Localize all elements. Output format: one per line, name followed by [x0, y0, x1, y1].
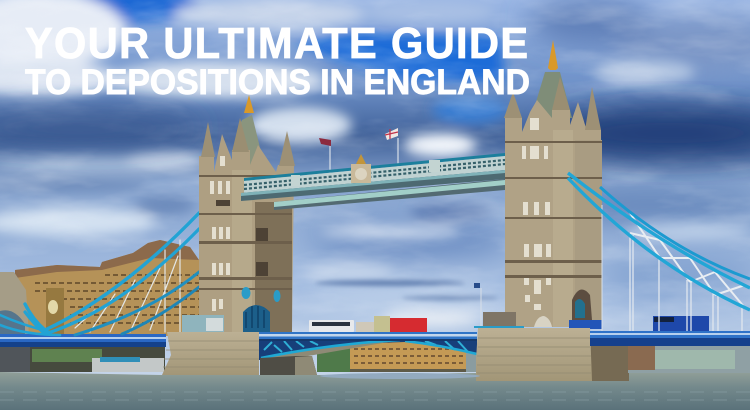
- right tower pier: [476, 328, 629, 381]
- city building left: [15, 240, 199, 336]
- left suspension cables: [0, 213, 199, 335]
- flag pole and lamp at right pier: [474, 283, 524, 328]
- title: [25, 19, 530, 102]
- left approach span deck: [0, 334, 166, 347]
- buses on bascule bridge: [309, 316, 427, 332]
- left tower: [182, 95, 295, 332]
- title: TO DEPOSITIONS IN ENGLAND: [25, 64, 530, 102]
- river water: [0, 372, 750, 410]
- flags and poles: [319, 128, 398, 175]
- walkway crest: [351, 154, 371, 183]
- right approach deck with blue bus: [590, 316, 750, 346]
- high-level walkway: [241, 153, 505, 210]
- left tower roof and spire: [231, 95, 265, 168]
- far bank under left deck: [0, 346, 165, 372]
- right tower: [504, 40, 602, 329]
- title: YOUR ULTIMATE GUIDE: [25, 19, 528, 68]
- small stone tower at left edge: [0, 272, 29, 336]
- left tower pier: [162, 332, 317, 375]
- bascule bridge deck: [259, 332, 477, 364]
- bascule bridge far bank buildings: [317, 342, 477, 372]
- far bank right side: [628, 346, 750, 373]
- right tower roof and spire: [536, 40, 572, 118]
- right suspension cables and hangers: [568, 173, 750, 331]
